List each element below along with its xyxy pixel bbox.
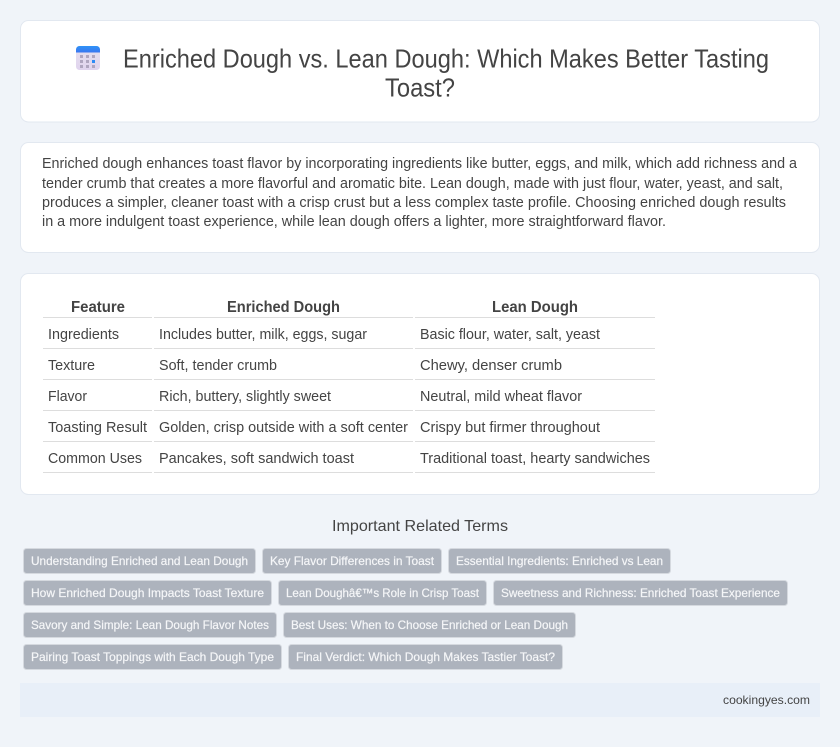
title: Enriched Dough vs. Lean Dough: Which Makes Better Tasting [123, 44, 769, 74]
panel: header [20, 20, 820, 122]
table header [71, 299, 578, 316]
table header: Lean Dough [492, 299, 578, 316]
table header: Enriched Dough [227, 299, 340, 316]
footer [20, 683, 820, 717]
table body: Chewy, denser crumb [420, 358, 562, 374]
title: Toast? [385, 73, 455, 103]
tag [284, 612, 576, 638]
table body: Traditional toast, hearty sandwiches [420, 451, 650, 467]
tag: Understanding Enriched and Lean Dough [31, 554, 248, 568]
tag [24, 612, 276, 638]
intro text: in a more indulgent toast experience, while lean dough offers a lighter, more straightforward flavor. [42, 214, 666, 230]
tag: Lean Doughâ€™s Role in Crisp Toast [286, 586, 480, 600]
tag: Best Uses: When to Choose Enriched or Lean Dough [291, 618, 568, 632]
table body: Ingredients [48, 327, 119, 343]
intro text: tender crumb that creates a more flavorful and aromatic bite. Lean dough, made with just flour, water, yeast, and salt, [42, 176, 783, 192]
title [123, 44, 769, 103]
table body: Crispy but firmer throughout [420, 420, 600, 436]
tag: Sweetness and Richness: Enriched Toast Experience [501, 586, 780, 600]
heading: related terms: Important Related Terms [332, 518, 508, 535]
tag [288, 644, 562, 670]
tag: How Enriched Dough Impacts Toast Texture [31, 586, 264, 600]
table body: Texture [48, 358, 95, 374]
tag: Savory and Simple: Lean Dough Flavor Notes [31, 618, 269, 632]
tag [494, 580, 788, 606]
table header: Feature [71, 299, 125, 316]
table body: Common Uses [48, 451, 142, 467]
intro text: Enriched dough enhances toast flavor by incorporating ingredients like butter, eggs, and milk, which add richness and a [42, 156, 798, 172]
tag [24, 644, 282, 670]
intro text: produces a simpler, cleaner toast with a crisp crust but a less complex taste profile. Choosing enriched dough results [42, 195, 786, 211]
intro text [42, 156, 798, 230]
panel: comparison table [20, 274, 820, 494]
table body: Rich, buttery, slightly sweet [159, 389, 331, 405]
tag [448, 548, 670, 574]
table rules [43, 317, 655, 473]
tag: Key Flavor Differences in Toast [270, 554, 435, 568]
table body: Includes butter, milk, eggs, sugar [159, 327, 367, 343]
related term tags [24, 548, 788, 670]
footer: cookingyes.com [723, 693, 810, 707]
table body: Golden, crisp outside with a soft center [159, 420, 408, 436]
tag: Pairing Toast Toppings with Each Dough Type [31, 650, 274, 664]
panel: intro [20, 142, 820, 252]
table body: Neutral, mild wheat flavor [420, 389, 582, 405]
tag [24, 548, 256, 574]
table body: Basic flour, water, salt, yeast [420, 327, 600, 343]
tag [24, 580, 272, 606]
table body: Toasting Result [48, 420, 147, 436]
table body: Soft, tender crumb [159, 358, 277, 374]
icon: calendar [76, 46, 100, 70]
tag [262, 548, 442, 574]
tag: Final Verdict: Which Dough Makes Tastier Toast? [296, 650, 555, 664]
table body: Pancakes, soft sandwich toast [159, 451, 354, 467]
table body [48, 327, 650, 467]
tag: Essential Ingredients: Enriched vs Lean [456, 554, 663, 568]
table body: Flavor [48, 389, 87, 405]
tag [278, 580, 486, 606]
